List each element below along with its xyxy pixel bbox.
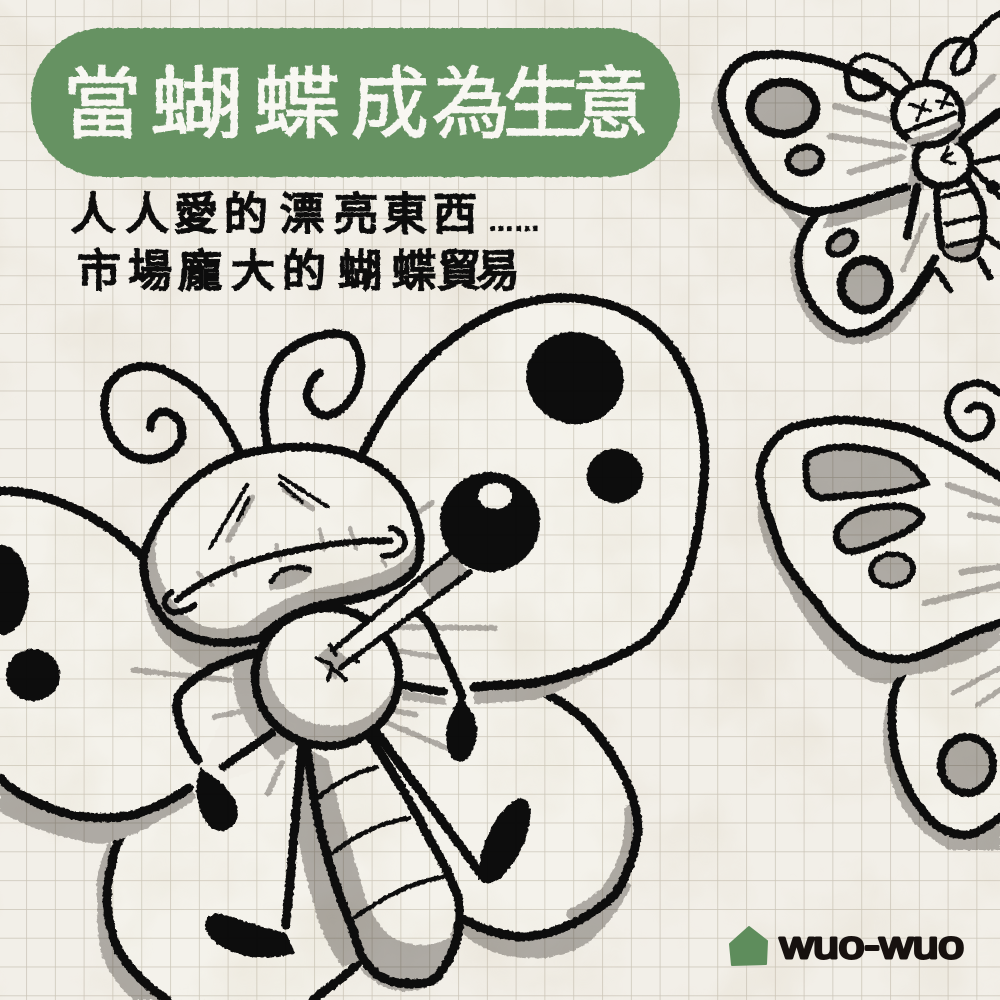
middle antenna (948, 383, 1000, 438)
subtitle text: 市場龐大的蝴蝶貿易 (77, 247, 520, 296)
pin head (440, 472, 540, 572)
title text (63, 60, 649, 148)
title text: 成為生意 (351, 60, 649, 148)
middle upper wing (760, 420, 1000, 659)
butterfly: top right dead specimen (712, 13, 1000, 344)
face: chin (268, 567, 312, 590)
main upper wing shadows (0, 545, 695, 844)
face: stitches (198, 528, 386, 585)
title text: 當 (63, 60, 141, 148)
face: eyebrows (228, 490, 312, 540)
main antennae (104, 333, 361, 459)
main lower wing shadows (97, 800, 636, 1000)
title banner (31, 28, 680, 177)
title text: 蝶 (253, 60, 340, 148)
main butterfly (0, 298, 705, 1000)
main right arm (400, 610, 477, 762)
title text: 蝴 (150, 61, 244, 148)
middle lower wing (892, 640, 1000, 835)
main upper right wing (362, 298, 705, 687)
main lower right wing (370, 684, 638, 937)
main right leg (377, 733, 541, 890)
lower right inner shade (572, 810, 630, 914)
top right upper spots (750, 82, 816, 134)
abdomen stripes (319, 767, 443, 917)
top right wing shadows (712, 62, 925, 344)
main lower left wing (107, 750, 360, 1000)
main left leg (205, 747, 302, 958)
main body shadows (145, 600, 446, 991)
logo (730, 925, 964, 967)
banner pill (31, 28, 680, 177)
middle veins (925, 485, 1000, 603)
main veins (133, 503, 495, 793)
main pin (317, 472, 540, 680)
middle wing spots (806, 447, 926, 498)
top right body (894, 83, 1000, 302)
middle lower wing shadow (883, 680, 1000, 850)
main left wing spots (0, 545, 29, 635)
subtitle text: …… (488, 206, 540, 236)
main abdomen (307, 737, 460, 984)
top right antennae (847, 13, 1000, 98)
top right lower spots (824, 226, 860, 260)
top right lower wing (799, 190, 935, 333)
abdomen inner shade (310, 750, 456, 984)
main head (144, 437, 422, 643)
face: mouth (177, 541, 390, 600)
main upper left wing (0, 490, 260, 818)
logo wordmark: wuo-wuo (779, 925, 964, 967)
top right veins (830, 77, 993, 172)
main right wing spots (516, 321, 634, 435)
middle upper wing shadow (758, 500, 1000, 683)
butterfly: right middle specimen (758, 383, 1000, 850)
main left arm (177, 653, 272, 831)
top right upper wing (722, 55, 993, 212)
top right legs (907, 187, 917, 236)
subtitle text: 人人愛的漂亮東西 (71, 190, 477, 239)
logo house icon (730, 927, 767, 965)
subtitle text (71, 190, 540, 296)
main thorax (255, 602, 399, 746)
middle lower spot (941, 737, 993, 793)
